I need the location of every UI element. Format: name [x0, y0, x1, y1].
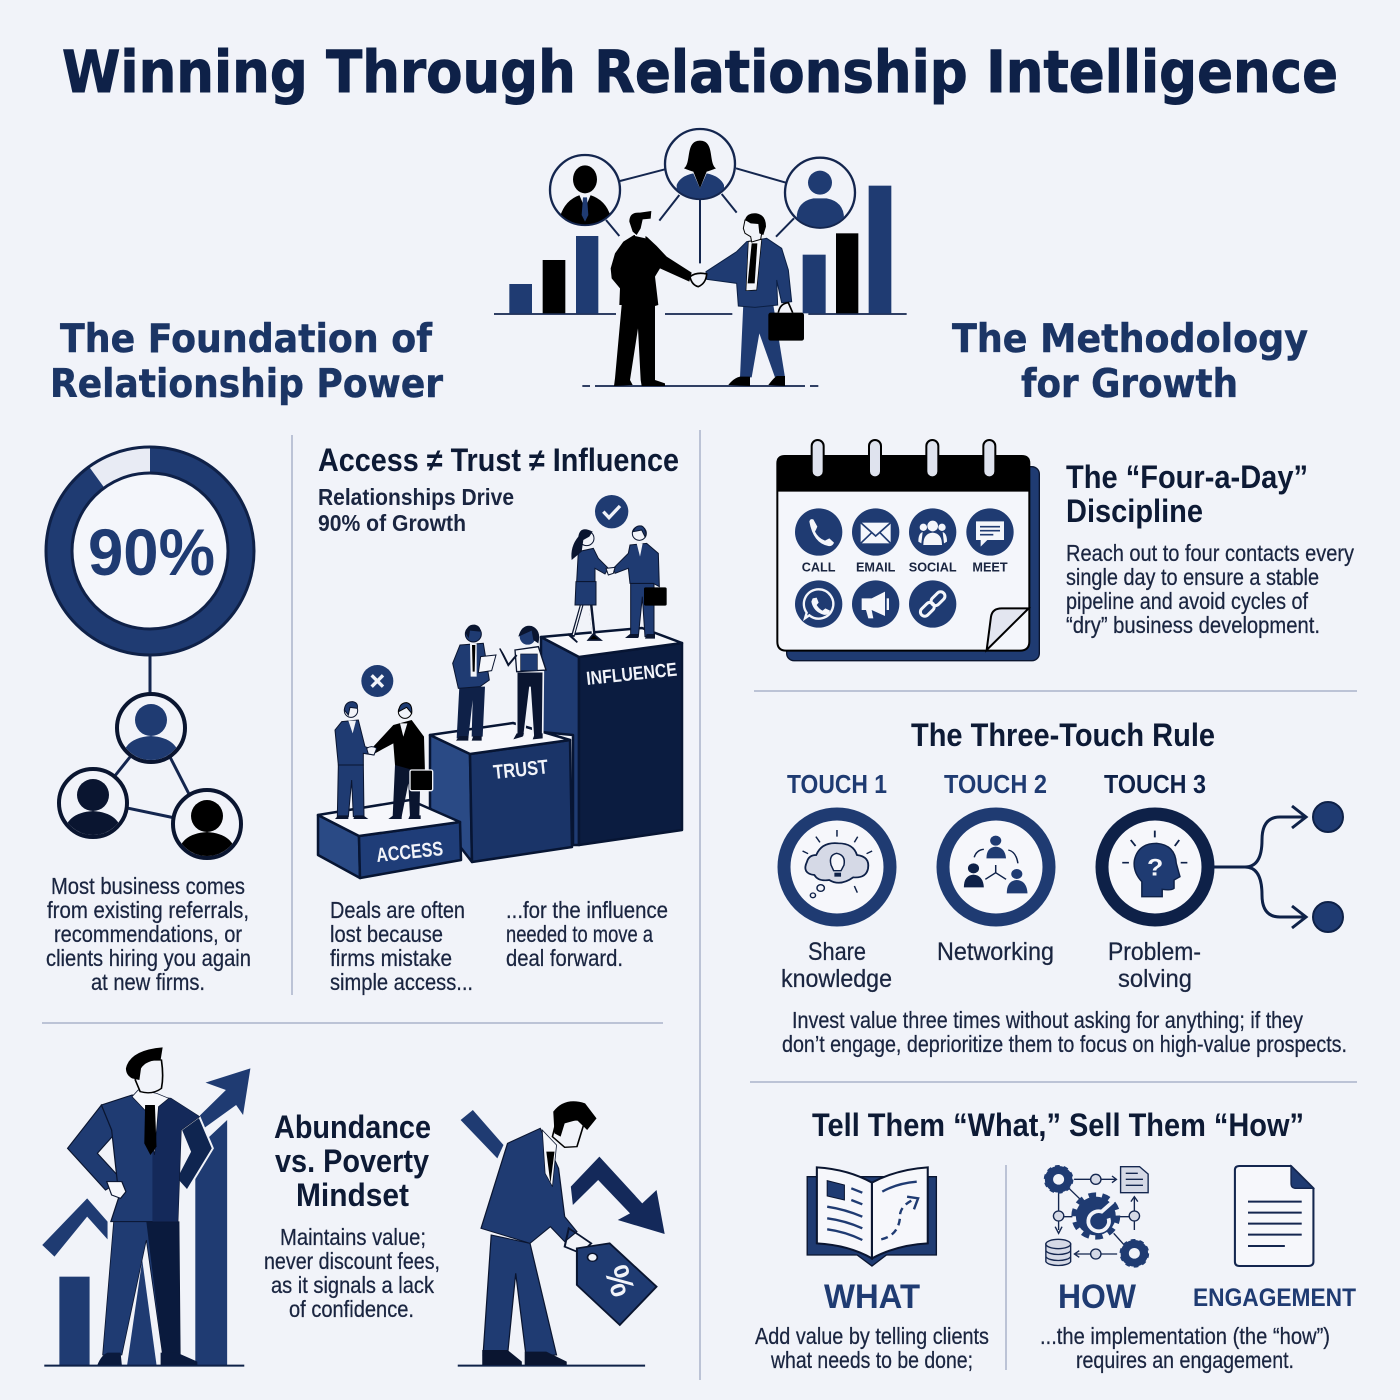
icon: open book [807, 1167, 936, 1266]
heading: three-touch rule: The Three-Touch Rule [911, 717, 1215, 753]
stair label: influence: INFLUENCE [585, 660, 678, 690]
network of three contacts [59, 656, 241, 858]
touch captions: Networking [937, 938, 1054, 966]
heading: four-a-day [1066, 459, 1308, 529]
figure: confident man [68, 1047, 213, 1365]
text: for the influence: needed to move a [506, 921, 653, 947]
heading: foundation [50, 317, 444, 407]
text: most business comes: from existing referrals, [47, 897, 249, 923]
text: most business comes [46, 873, 251, 995]
hero illustration: handshake and network [494, 129, 907, 386]
donut: 90%: 90% [88, 515, 215, 589]
icon: document [1235, 1166, 1313, 1266]
text: four-a-day: Reach out to four contacts every [1066, 540, 1354, 566]
middle pair [453, 625, 546, 741]
what label and text: WHAT [824, 1278, 920, 1316]
figures on stairs [335, 495, 667, 819]
how label and text: HOW [1058, 1278, 1137, 1316]
text: four-a-day [1066, 540, 1354, 638]
figure: discounting man [481, 1101, 597, 1365]
heading: foundation: The Foundation of [60, 317, 433, 362]
arrows down [461, 1110, 665, 1234]
touch captions: Problem- [1108, 938, 1201, 966]
touch captions: knowledge [781, 965, 892, 993]
staircase: access trust influence [318, 628, 682, 878]
heading: methodology: for Growth [1021, 362, 1238, 407]
text: maintains value: as it signals a lack [271, 1272, 434, 1298]
bottom pair [335, 702, 433, 819]
touch icons [803, 830, 1187, 898]
heading: abundance mindset: Mindset [296, 1177, 409, 1213]
text: invest value [782, 1007, 1347, 1057]
text: deals lost [330, 897, 473, 995]
figure: left businessman [611, 211, 692, 386]
icon: megaphone [862, 592, 889, 618]
text: maintains value: Maintains value; [280, 1224, 426, 1250]
text: deals lost: firms mistake [330, 945, 452, 971]
text: invest value: Invest value three times without asking for anything; if they [792, 1007, 1303, 1033]
how label and text [1040, 1278, 1330, 1373]
icon: people network [964, 836, 1028, 893]
badge: check [595, 495, 628, 528]
calendar with contact icons: EMAIL [856, 561, 896, 575]
text: for the influence: deal forward. [506, 945, 623, 971]
text: for the influence: ...for the influence [506, 897, 668, 923]
touch labels: TOUCH 2 [944, 769, 1047, 799]
touch captions: Share [808, 938, 866, 966]
badge: cross [361, 665, 393, 697]
heading: foundation: Relationship Power [50, 362, 444, 407]
heading: tell them what: Tell Them “What,” Sell Them “How” [812, 1107, 1304, 1143]
how label and text: requires an engagement. [1076, 1347, 1294, 1373]
touch labels: TOUCH 1 [787, 769, 887, 799]
icon: whatsapp [804, 589, 833, 619]
heading: access trust influence: Relationships Drive [318, 484, 514, 510]
heading: methodology [952, 317, 1308, 407]
text: maintains value: of confidence. [289, 1296, 414, 1322]
touch rings and branch [784, 802, 1343, 932]
what label and text [755, 1278, 989, 1373]
text: most business comes: Most business comes [51, 873, 245, 899]
text: most business comes: clients hiring you again [46, 945, 251, 971]
donut: 90% [46, 447, 254, 655]
price tag percent: % [596, 1261, 642, 1301]
top pair [568, 526, 667, 642]
text: most business comes: at new firms. [91, 969, 205, 995]
text: maintains value [264, 1224, 440, 1322]
touch captions: solving [1118, 965, 1192, 993]
heading: abundance mindset [274, 1109, 431, 1213]
heading: access trust influence [318, 442, 679, 536]
icon: speech bubble [976, 521, 1004, 547]
what how engagement icons [807, 1166, 1313, 1266]
text: four-a-day: single day to ensure a stable [1066, 564, 1319, 590]
stair label: trust: TRUST [492, 756, 549, 784]
calendar with contact icons: CALL [802, 561, 836, 575]
icon: head with question [1122, 831, 1187, 897]
text: four-a-day: “dry” business development. [1066, 612, 1320, 638]
heading: methodology: The Methodology [952, 317, 1308, 362]
page curl [987, 608, 1029, 650]
stair label: access: ACCESS [375, 838, 444, 867]
heading: four-a-day: Discipline [1066, 493, 1203, 529]
calendar with contact icons [777, 440, 1039, 661]
icon: head with question: ? [1147, 855, 1163, 881]
icon: envelope [861, 523, 891, 543]
icon: link [919, 590, 947, 618]
text: for the influence [506, 897, 668, 971]
heading: abundance mindset: vs. Poverty [275, 1143, 429, 1179]
touch labels [787, 769, 1206, 799]
icon: phone [809, 519, 834, 546]
calendar with contact icons: SOCIAL [909, 561, 957, 575]
what label and text: what needs to be done; [770, 1347, 973, 1373]
text: four-a-day: pipeline and avoid cycles of [1066, 588, 1309, 614]
text: maintains value: never discount fees, [264, 1248, 440, 1274]
heading: abundance mindset: Abundance [274, 1109, 431, 1145]
heading: access trust influence: 90% of Growth [318, 510, 466, 536]
text: deals lost: simple access... [330, 969, 473, 995]
text: deals lost: lost because [330, 921, 443, 947]
what label and text: Add value by telling clients [755, 1323, 989, 1349]
figure: right businessman [690, 213, 804, 386]
engagement label: ENGAGEMENT [1193, 1284, 1356, 1312]
touch labels: TOUCH 3 [1104, 769, 1206, 799]
touch captions [781, 938, 1201, 993]
how label and text: ...the implementation (the “how”) [1040, 1323, 1330, 1349]
icon: process gears [1046, 1167, 1148, 1266]
icon: people [918, 521, 947, 545]
calendar with contact icons: MEET [972, 561, 1008, 575]
abundance illustration [42, 1047, 665, 1366]
heading: access trust influence: Access ≠ Trust ≠ Influence [318, 442, 679, 478]
text: most business comes: recommendations, or [54, 921, 242, 947]
text: deals lost: Deals are often [330, 897, 465, 923]
heading: four-a-day: The “Four-a-Day” [1066, 459, 1308, 495]
icon: idea cloud [803, 830, 872, 898]
price tag [577, 1243, 657, 1325]
